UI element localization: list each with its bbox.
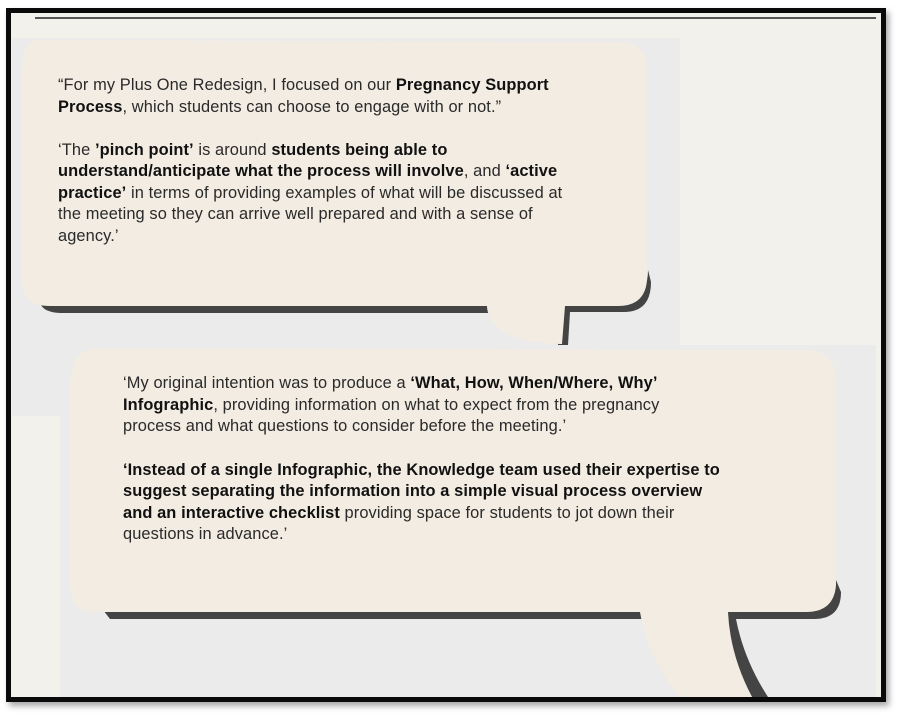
text: bubble 2: process and what questions to consider before the meeting.’	[123, 417, 566, 435]
text: bubble 1	[58, 76, 562, 244]
text: bubble 1: ‘The ’pinch point’ is around students being able to	[58, 140, 447, 158]
bubble 1	[22, 40, 647, 344]
text: bubble 2: suggest separating the information into a simple visual process overview	[123, 482, 702, 500]
bubble 2	[70, 348, 836, 697]
text: bubble 1: the meeting so they can arrive well prepared and with a sense of	[58, 205, 533, 223]
text: bubble 2: questions in advance.’	[123, 525, 287, 543]
text: bubble 2: and an interactive checklist providing space for students to jot down their	[123, 504, 674, 522]
text: bubble 1: “For my Plus One Redesign, I focused on our Pregnancy Support	[58, 76, 549, 94]
text: bubble 1: understand/anticipate what the process will involve, and ‘active	[58, 162, 557, 180]
text: bubble 1: agency.’	[58, 226, 119, 244]
text: bubble 2: Infographic, providing information on what to expect from the pregnancy	[123, 396, 659, 414]
text: bubble 1: Process, which students can choose to engage with or not.”	[58, 98, 501, 116]
text: bubble 2: ‘My original intention was to produce a ‘What, How, When/Where, Why’	[123, 374, 658, 392]
text: bubble 1: practice’ in terms of providing examples of what will be discussed at	[58, 184, 562, 202]
bubble 2 shadow	[100, 580, 841, 697]
bubble 1 shadow	[40, 270, 651, 345]
text: bubble 2: ‘Instead of a single Infographic, the Knowledge team used their expertise to	[123, 460, 720, 478]
text: bubble 2	[123, 374, 720, 543]
